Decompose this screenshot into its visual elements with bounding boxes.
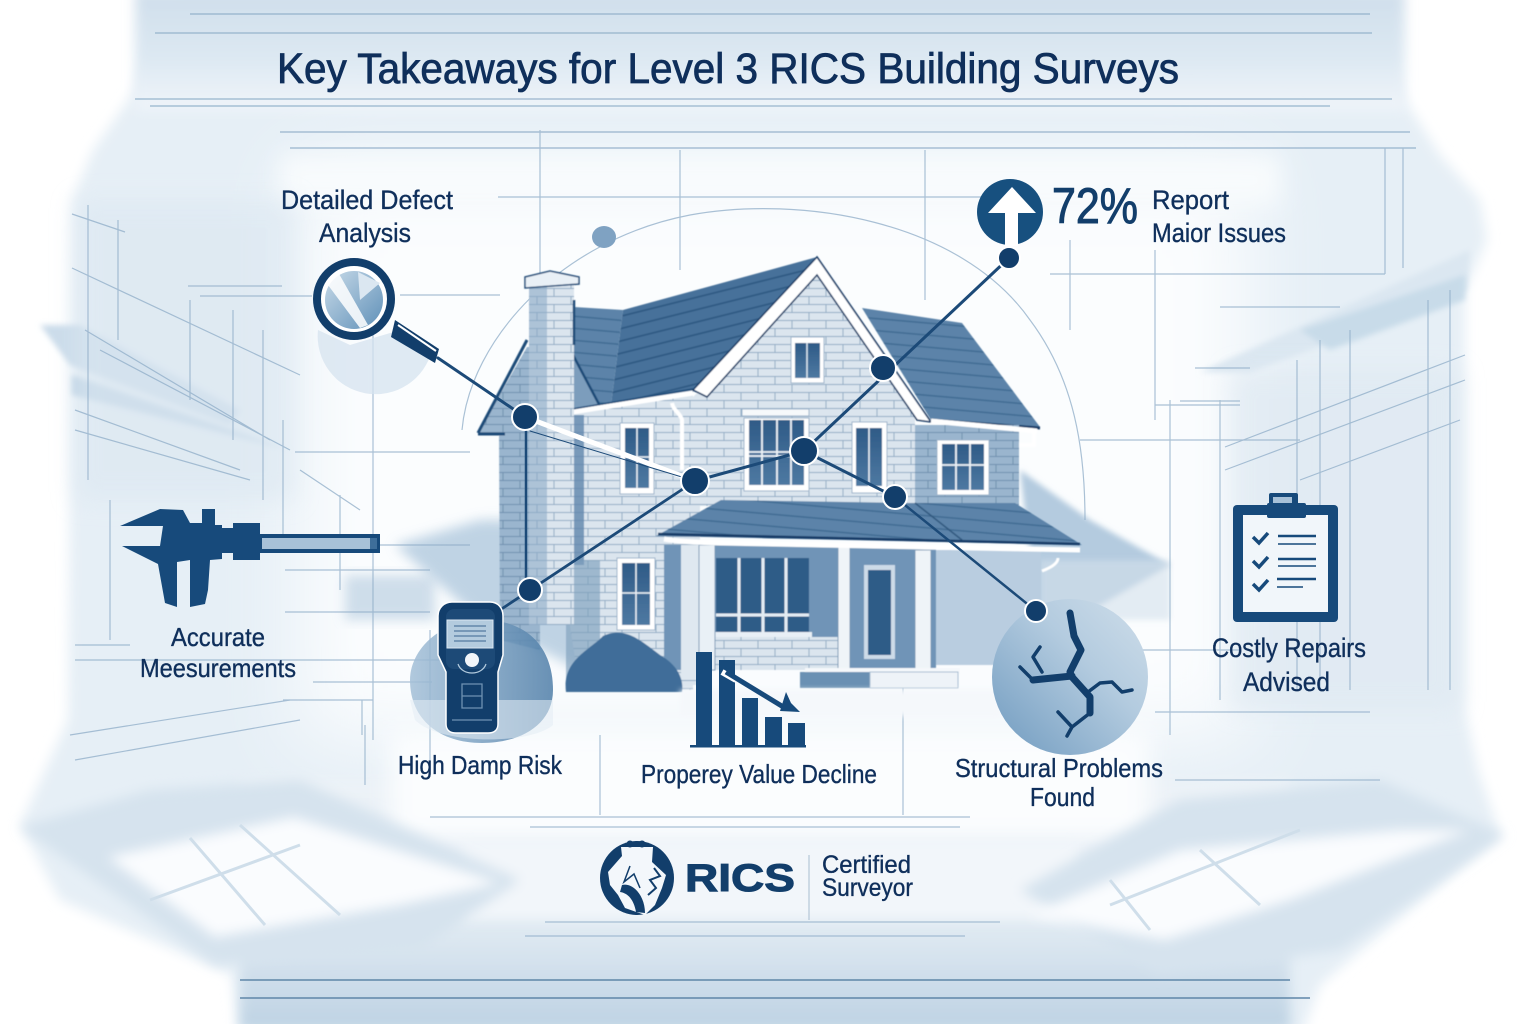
label: costly repairs advised xyxy=(1212,633,1366,697)
icon: clipboard checklist xyxy=(1233,493,1338,622)
icon: caliper xyxy=(120,509,380,607)
left wall xyxy=(566,395,693,690)
RICS logo and certified surveyor badge: Certified xyxy=(822,851,911,879)
small pale dot xyxy=(592,226,616,248)
label: accurate measurements: Accurate xyxy=(171,622,265,652)
RICS logo and certified surveyor badge: RICS xyxy=(685,857,795,900)
label: costly repairs advised: Costly Repairs xyxy=(1212,633,1366,663)
icon: up arrow xyxy=(977,179,1043,246)
lower wall xyxy=(600,505,700,685)
node markers xyxy=(512,247,1047,622)
right wing window xyxy=(937,440,989,495)
porch roof xyxy=(656,500,1082,545)
left window xyxy=(620,423,654,494)
stat: 72% report major issues xyxy=(977,178,1286,248)
downspout xyxy=(672,403,682,470)
stat: 72% report major issues: Maior Issues xyxy=(1152,218,1286,248)
gable window xyxy=(791,337,824,383)
porch front xyxy=(664,545,936,670)
door xyxy=(864,565,895,659)
icon: damp meter xyxy=(410,602,553,743)
roof bands xyxy=(40,325,240,425)
right wing wall xyxy=(915,425,1019,505)
label: detailed defect analysis: Detailed Defect xyxy=(281,185,453,215)
main roof left slope xyxy=(611,257,817,405)
chart: declining bars xyxy=(690,652,806,748)
shrub xyxy=(566,633,682,692)
house illustration xyxy=(478,257,1082,692)
label: costly repairs advised: Advised xyxy=(1243,667,1330,697)
icon: lion emblem xyxy=(600,840,674,915)
RICS logo and certified surveyor badge xyxy=(600,840,913,920)
label: high damp risk: High Damp Risk xyxy=(398,750,563,780)
label: property value decline: Properey Value Decline xyxy=(641,759,877,789)
steps xyxy=(800,668,960,688)
small left gable xyxy=(564,338,601,413)
building wash xyxy=(75,200,295,500)
label: accurate measurements xyxy=(140,622,296,683)
white barge boards xyxy=(693,257,931,422)
right centre window xyxy=(852,422,887,493)
yard ground xyxy=(680,690,1000,716)
label: structural problems found: Found xyxy=(1030,782,1095,812)
label: accurate measurements: Meesurements xyxy=(140,653,296,683)
label: detailed defect analysis xyxy=(281,185,453,248)
eave left xyxy=(566,393,693,413)
lower left window xyxy=(617,558,655,630)
RICS logo and certified surveyor badge: Surveyor xyxy=(822,874,913,902)
label: structural problems found xyxy=(955,753,1163,812)
chimney xyxy=(525,271,579,625)
centre window xyxy=(742,409,809,491)
bottom rules xyxy=(240,980,1310,998)
right roof xyxy=(862,308,1040,427)
stat: 72% report major issues: 72% xyxy=(1052,178,1138,234)
label: structural problems found: Structural Problems xyxy=(955,753,1163,783)
icon: cracked wall disc xyxy=(992,599,1148,755)
title: Key Takeaways for Level 3 RICS Building Surveys xyxy=(277,45,1179,93)
icon: magnifying glass xyxy=(317,262,439,394)
stat: 72% report major issues: Report xyxy=(1152,185,1229,215)
label: detailed defect analysis: Analysis xyxy=(319,218,411,248)
left gable wing xyxy=(478,347,540,650)
connector lines xyxy=(438,258,1036,611)
left window reflection xyxy=(20,780,520,965)
front wall xyxy=(693,275,915,506)
rear roof xyxy=(564,307,623,407)
right window reflection xyxy=(1020,780,1505,975)
